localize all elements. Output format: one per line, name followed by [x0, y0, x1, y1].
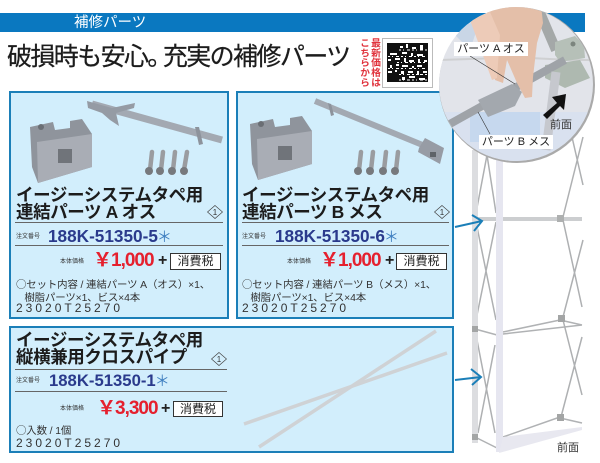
- product name: 縦横兼用クロスパイプ: [16, 346, 187, 366]
- product code: 23020T25270: [16, 436, 123, 450]
- price: [60, 398, 223, 419]
- price: +: [161, 400, 170, 417]
- description: [16, 276, 210, 304]
- product name: [242, 185, 429, 222]
- product name: 連結パーツ A オス: [16, 202, 156, 222]
- price: [287, 250, 447, 271]
- price: [60, 250, 221, 271]
- price: +: [158, 252, 167, 269]
- order number: 注文番号: [242, 234, 266, 240]
- price: 消費税: [403, 254, 440, 268]
- label: front, lower: 前面: [557, 442, 579, 454]
- grade mark: [434, 205, 450, 219]
- description: ○入数 / 1個: [16, 422, 71, 437]
- product name: [16, 330, 203, 366]
- latest price note: [358, 38, 381, 87]
- title: 破損時も安心。充実の補修パーツ: [7, 43, 350, 71]
- product code: 23020T25270: [16, 301, 123, 315]
- price: 消費税: [177, 254, 214, 268]
- label: part B: パーツ B メス: [482, 136, 550, 148]
- panel: part B: [236, 91, 454, 319]
- part A illustration: [30, 100, 223, 183]
- price: 本体価格: [60, 406, 84, 412]
- description: ○セット内容 / 連結パーツ A（オス）×1、: [16, 276, 210, 291]
- grade mark: 1: [217, 355, 222, 364]
- circular photo inset: [439, 7, 595, 163]
- QR code: [382, 38, 433, 88]
- grade mark: [211, 352, 227, 366]
- product code: 23020T25270: [242, 301, 349, 315]
- header band: [0, 13, 585, 32]
- order number: 188K-51350-1＊: [49, 371, 170, 390]
- grade mark: 1: [213, 208, 218, 217]
- order number: 注文番号: [16, 234, 40, 240]
- grade mark: [207, 205, 223, 219]
- order number: 188K-51350-6＊: [275, 226, 399, 246]
- panel: cross pipe: [9, 326, 454, 453]
- latest price note: こちらから: [358, 38, 369, 87]
- latest price note: 最新価格は: [369, 38, 380, 87]
- price: ￥1,000: [93, 250, 154, 271]
- part B illustration: [250, 98, 444, 180]
- label: part A: パーツ A オス: [457, 43, 525, 55]
- label: front: 前面: [550, 119, 572, 131]
- cross pipe illustration: [244, 330, 448, 448]
- order number: 188K-51350-5＊: [48, 226, 172, 246]
- description: ○セット内容 / 連結パーツ B（メス）×1、: [242, 276, 436, 291]
- product name: イージーシステムタペ用: [242, 185, 429, 205]
- header text: 補修パーツ: [74, 15, 146, 31]
- grade mark: 1: [440, 208, 445, 217]
- price: 本体価格: [60, 259, 84, 265]
- product name: イージーシステムタペ用: [16, 185, 203, 205]
- product name: [16, 185, 203, 222]
- price: ￥1,000: [320, 250, 381, 271]
- product name: イージーシステムタペ用: [16, 330, 203, 350]
- product name: 連結パーツ B メス: [242, 202, 383, 222]
- description: 樹脂パーツ×1、ビス×4本: [250, 293, 366, 304]
- panel: part A: [9, 91, 229, 319]
- price: ￥3,300: [97, 398, 158, 419]
- price: +: [385, 252, 394, 269]
- description: [242, 276, 436, 304]
- description: 樹脂パーツ×1、ビス×4本: [24, 293, 140, 304]
- price: 消費税: [180, 402, 216, 416]
- order number: 注文番号: [16, 378, 40, 384]
- price: 本体価格: [287, 259, 311, 265]
